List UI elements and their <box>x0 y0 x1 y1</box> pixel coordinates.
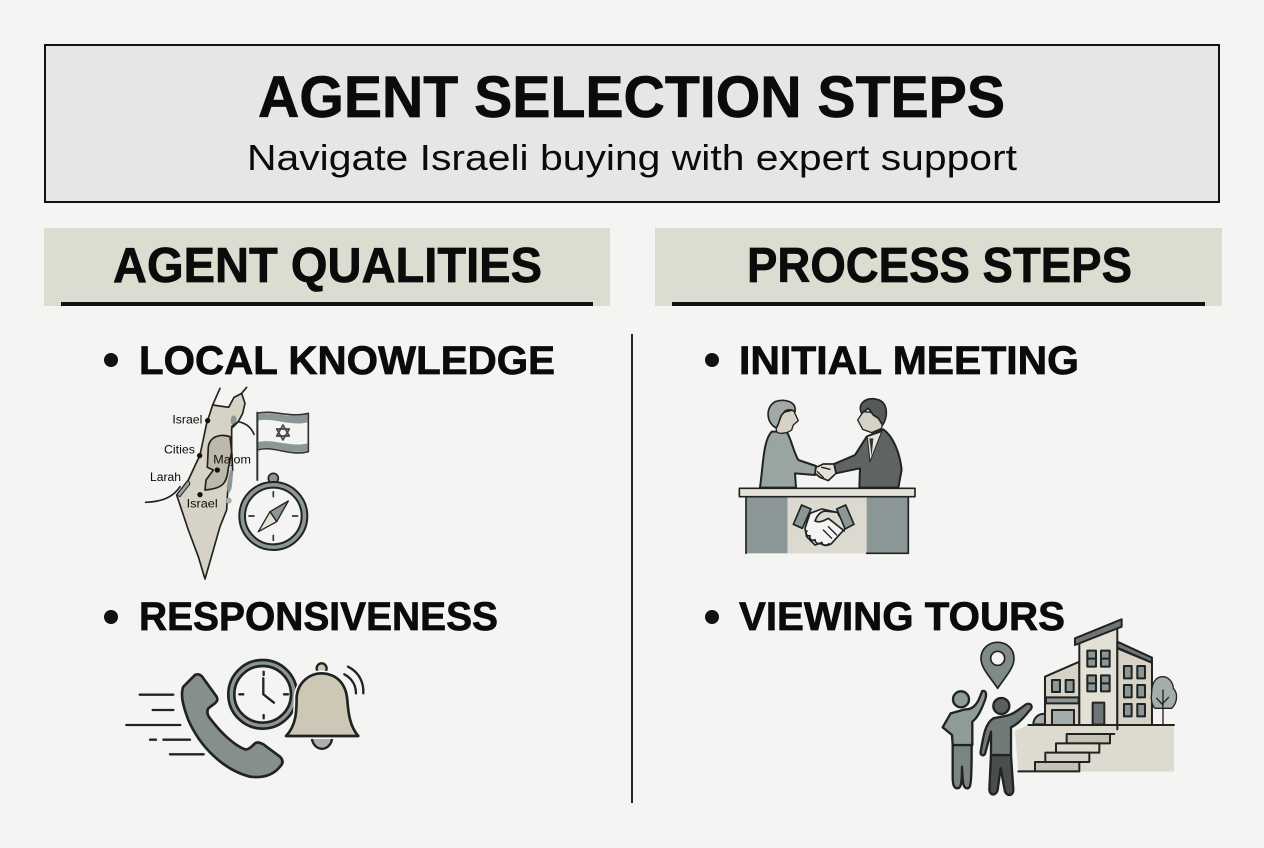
panel heading: process steps: PROCESS STEPS <box>747 239 1132 293</box>
panel heading: agent qualities <box>44 228 610 306</box>
panel heading: process steps <box>655 228 1222 306</box>
map of israel: Majom <box>213 453 251 466</box>
list item: viewing tours: VIEWING TOURS <box>739 595 1065 639</box>
ground <box>1015 725 1174 772</box>
map of israel: Cities <box>164 443 195 456</box>
clasped hands <box>815 464 836 481</box>
map of israel: Larah <box>150 471 181 484</box>
map of israel: Israel <box>187 498 218 511</box>
man <box>834 399 902 488</box>
compass <box>239 473 307 550</box>
map of israel: Israel <box>172 414 202 427</box>
woman <box>760 400 816 488</box>
person right <box>981 698 1032 795</box>
bell <box>286 663 363 749</box>
clock <box>228 660 297 729</box>
icon: israel map with flag and compass <box>146 387 308 579</box>
flag <box>257 412 308 480</box>
icon: agent and client viewing a house <box>943 619 1177 795</box>
icon: two people shaking hands over a desk <box>739 399 915 553</box>
title banner <box>45 45 1219 202</box>
phone <box>182 674 282 777</box>
desk <box>739 488 915 553</box>
handshake emblem <box>793 505 854 545</box>
steps <box>1018 734 1114 771</box>
person left <box>943 691 986 788</box>
icon: phone, clock and bell <box>126 660 363 777</box>
title: AGENT SELECTION STEPS <box>258 65 1005 130</box>
panel heading: agent qualities: AGENT QUALITIES <box>113 239 542 293</box>
location pin <box>981 642 1014 688</box>
list item: responsiveness: RESPONSIVENESS <box>139 595 498 639</box>
speed lines <box>126 695 204 754</box>
map of israel <box>146 387 254 579</box>
subtitle: Navigate Israeli buying with expert support <box>247 137 1017 178</box>
house <box>1028 619 1177 729</box>
list item: initial meeting: INITIAL MEETING <box>739 339 1079 383</box>
list item: local knowledge: LOCAL KNOWLEDGE <box>139 339 555 383</box>
